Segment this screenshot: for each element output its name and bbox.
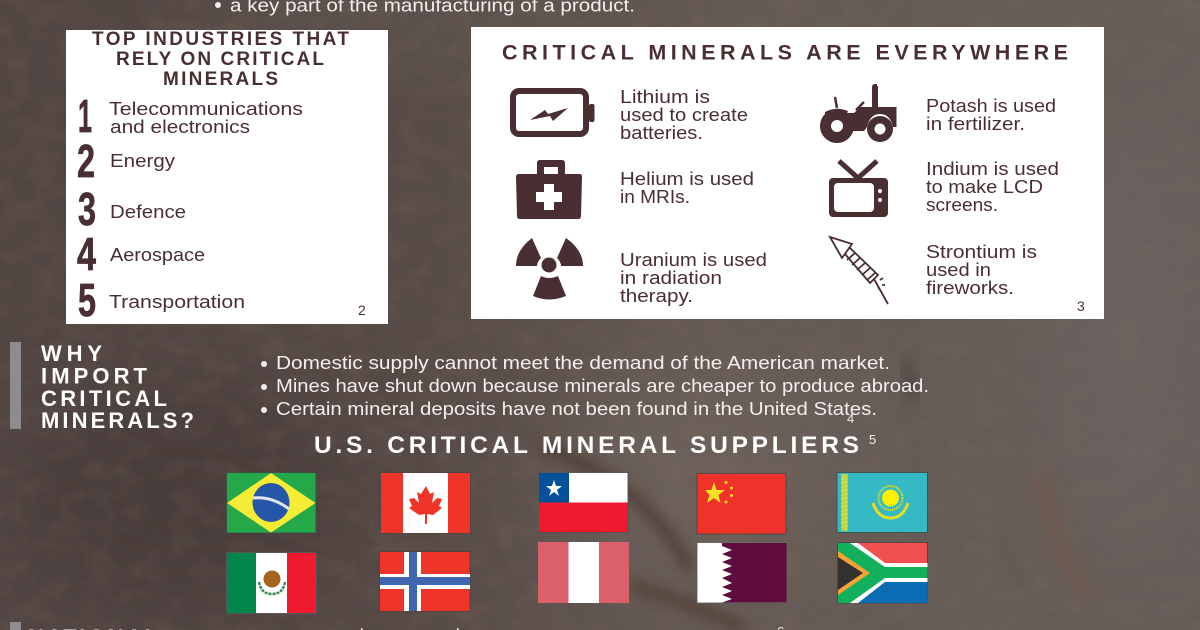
indium text: screens. [926, 194, 998, 215]
icon: radiation [516, 238, 583, 300]
panel: top industries [66, 29, 388, 326]
flag: Peru [538, 542, 629, 603]
icon: television [829, 161, 888, 217]
flag: Mexico [226, 552, 316, 614]
reasons list: 4 [847, 411, 854, 426]
strontium text: Strontium is [926, 241, 1037, 262]
panel: critical minerals are everywhere [471, 27, 1104, 319]
industry 3 [78, 183, 186, 235]
heading: top industries: TOP INDUSTRIES THAT [92, 29, 349, 50]
industry 4 [77, 228, 205, 280]
reasons list: Mines have shut down because minerals are cheaper to produce abroad. [276, 375, 929, 396]
industry 4: 4 [77, 228, 96, 280]
section: why import [10, 341, 194, 433]
flag: Norway [380, 552, 470, 612]
heading: top industries [92, 29, 349, 90]
industry 5 [78, 274, 245, 326]
helium text: in MRIs. [620, 186, 690, 207]
heading: why import critical minerals: WHY [41, 341, 102, 366]
heading: why import critical minerals: CRITICAL [41, 386, 167, 411]
industry 1: and electronics [110, 116, 250, 137]
heading: suppliers: 5 [869, 432, 876, 447]
industry 2: 2 [77, 135, 95, 187]
uranium text: in radiation [620, 267, 722, 288]
industry 3: Defence [110, 201, 186, 222]
icon: firework rocket [830, 237, 888, 304]
potash text: in fertilizer. [926, 113, 1025, 134]
heading: top industries: RELY ON CRITICAL [116, 49, 324, 70]
uranium text: Uranium is used [620, 249, 767, 270]
industry 1: 1 [78, 90, 92, 142]
industry 5: 5 [78, 274, 96, 326]
helium text [620, 168, 754, 207]
potash text: Potash is used [926, 95, 1056, 116]
industry 5: Transportation [109, 291, 245, 312]
reasons list [261, 352, 929, 426]
strontium text [926, 241, 1037, 298]
heading: why import critical minerals: IMPORT [41, 364, 148, 388]
flag: South Africa [838, 542, 928, 603]
flag: Brazil [226, 472, 316, 533]
lithium text: batteries. [620, 122, 703, 143]
lithium text: Lithium is [620, 86, 710, 107]
flag: Canada [380, 472, 470, 534]
icon: battery [513, 91, 594, 134]
heading: suppliers: U.S. CRITICAL MINERAL SUPPLIERS [314, 432, 859, 459]
section: national (cut off) [10, 622, 784, 630]
heading: top industries: MINERALS [163, 69, 278, 90]
flag: Qatar [697, 542, 786, 603]
indium text [926, 158, 1059, 215]
industry 2 [77, 135, 176, 187]
indium text: Indium is used [926, 158, 1059, 179]
heading: why import critical minerals [41, 341, 194, 433]
industry 2: Energy [110, 150, 176, 171]
industry 1: Telecommunications [109, 98, 303, 119]
potash text [926, 95, 1056, 134]
indium text: to make LCD [926, 176, 1043, 197]
helium text: Helium is used [620, 168, 754, 189]
footnote 2: 2 [358, 302, 366, 318]
lithium text: used to create [620, 104, 748, 125]
industry 3: 3 [78, 183, 96, 235]
strontium text: fireworks. [926, 277, 1014, 298]
heading: everywhere: CRITICAL MINERALS ARE EVERYWHERE [502, 40, 1068, 64]
flag: Chile [538, 472, 628, 532]
footnote 3: 3 [1077, 298, 1085, 314]
uranium text [620, 249, 767, 306]
strontium text: used in [926, 259, 991, 280]
reasons list: Domestic supply cannot meet the demand of the American market. [276, 352, 890, 373]
icon: first aid kit [516, 160, 582, 219]
flag: China [697, 474, 786, 534]
heading: why import critical minerals: MINERALS? [41, 408, 194, 433]
industry 1 [78, 90, 303, 142]
reasons list: Certain mineral deposits have not been found in the United States. [276, 398, 877, 419]
icon: tractor [820, 84, 896, 143]
lithium text [620, 86, 748, 143]
industry 4: Aerospace [110, 244, 205, 265]
flag: Kazakhstan [837, 472, 928, 532]
uranium text: therapy. [620, 285, 693, 306]
